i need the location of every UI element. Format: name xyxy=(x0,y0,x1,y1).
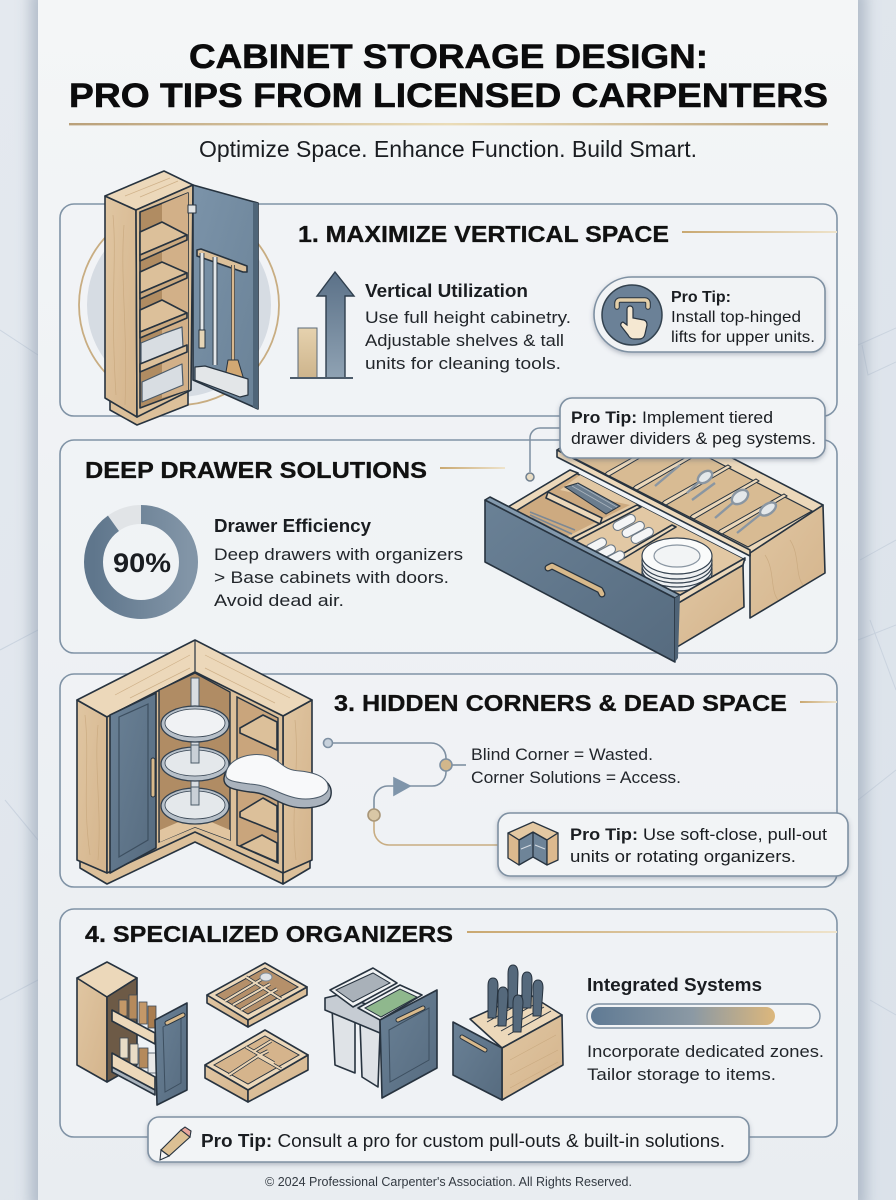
connector: tip to drawer xyxy=(526,428,560,481)
title xyxy=(69,38,828,115)
title: PRO TIPS FROM LICENSED CARPENTERS xyxy=(69,77,828,115)
illustration: pull-out spice rack xyxy=(77,962,187,1105)
text block: vertical utilization: Use full height cabinetry. xyxy=(365,308,571,327)
text block: blind corner: Corner Solutions = Access. xyxy=(471,768,681,787)
text block: drawer efficiency: Drawer Efficiency xyxy=(214,516,371,536)
flow connector xyxy=(324,738,498,845)
panel: maximize vertical space xyxy=(60,171,837,425)
text block: integrated systems body: Incorporate dedicated zones. xyxy=(587,1042,824,1061)
heading: 1. MAXIMIZE VERTICAL SPACE xyxy=(298,221,669,247)
callout: pro tip lifts xyxy=(594,277,825,352)
text block: integrated systems body: Tailor storage to items. xyxy=(587,1065,776,1084)
chart: 90 percent donut: 90% xyxy=(113,548,171,578)
callout: pro tip corners: Pro Tip: Use soft-close, pull-out xyxy=(570,825,827,844)
text block: vertical utilization: units for cleaning tools. xyxy=(365,354,561,373)
callout: pro tip dividers: Pro Tip: Implement tiered xyxy=(571,408,773,427)
text block: drawer efficiency xyxy=(214,516,463,610)
callout: pro tip dividers xyxy=(560,398,825,458)
heading: 4. SPECIALIZED ORGANIZERS xyxy=(85,921,453,947)
text block: integrated systems heading: Integrated Systems xyxy=(587,975,762,995)
panel: specialized organizers xyxy=(60,909,837,1162)
text block: vertical utilization: Vertical Utilization xyxy=(365,281,528,301)
illustration: tall cabinet with open door xyxy=(105,171,258,425)
progress bar xyxy=(587,1004,820,1028)
icon: hand on handle xyxy=(602,285,662,345)
callout: pro tip lifts: Install top-hinged xyxy=(671,309,801,326)
icon: circular backdrop xyxy=(79,205,279,405)
heading: DEEP DRAWER SOLUTIONS xyxy=(85,457,427,483)
illustration: knife block drawer xyxy=(453,965,563,1100)
heading: 3. HIDDEN CORNERS & DEAD SPACE xyxy=(334,690,787,716)
title: CABINET STORAGE DESIGN: xyxy=(189,38,708,76)
illustration: divided tray xyxy=(205,1030,308,1102)
chart: 90 percent donut xyxy=(94,514,188,610)
panel: hidden corners and dead space xyxy=(60,640,848,887)
callout: pro tip consult xyxy=(148,1117,749,1162)
chart: bar and up arrow xyxy=(290,272,354,379)
text block: drawer efficiency: > Base cabinets with doors. xyxy=(214,568,449,587)
text block: blind corner xyxy=(471,745,681,787)
illustration: cutlery tray xyxy=(207,963,307,1027)
text block: blind corner: Blind Corner = Wasted. xyxy=(471,745,653,764)
subtitle: Optimize Space. Enhance Function. Build Smart. xyxy=(199,136,697,162)
icon: pencil xyxy=(160,1127,191,1160)
callout: pro tip corners xyxy=(498,813,848,876)
icon: corner unit xyxy=(508,822,558,865)
text block: drawer efficiency: Avoid dead air. xyxy=(214,591,344,610)
panel: deep drawer solutions xyxy=(60,398,837,662)
callout: pro tip dividers: drawer dividers & peg systems. xyxy=(571,429,816,448)
text block: integrated systems body xyxy=(587,1042,824,1084)
illustration: corner cabinet with lazy susan xyxy=(77,640,331,884)
text block: drawer efficiency: Deep drawers with organizers xyxy=(214,545,463,564)
illustration: open deep drawer xyxy=(485,405,825,662)
callout: pro tip consult: Pro Tip: Consult a pro for custom pull-outs & built-in solutions. xyxy=(201,1131,725,1151)
illustration: pull-out bins xyxy=(325,968,437,1098)
text block: vertical utilization: Adjustable shelves & tall xyxy=(365,331,564,350)
text block: vertical utilization xyxy=(365,281,571,373)
callout: pro tip lifts: lifts for upper units. xyxy=(671,329,815,346)
footer: © 2024 Professional Carpenter's Association. All Rights Reserved. xyxy=(265,1175,632,1189)
callout: pro tip lifts: Pro Tip: xyxy=(671,289,731,306)
callout: pro tip corners: units or rotating organizers. xyxy=(570,847,796,866)
